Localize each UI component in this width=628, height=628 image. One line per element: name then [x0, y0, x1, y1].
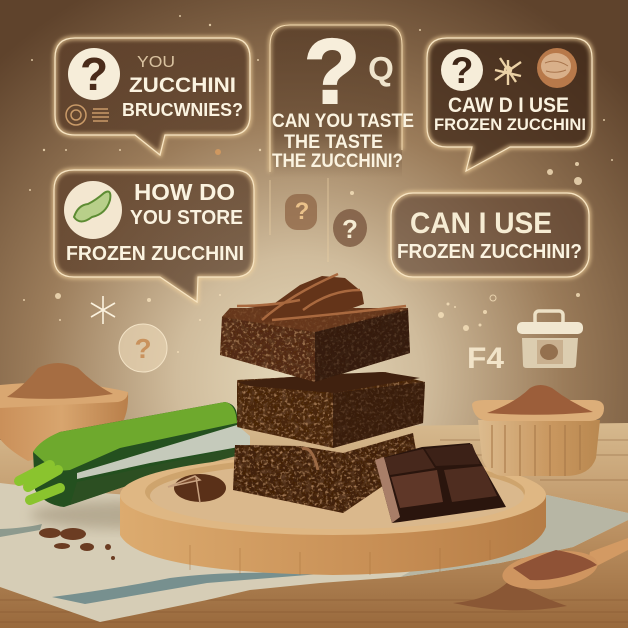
question text: CAN I USE — [410, 207, 552, 240]
icon: question circle: ? — [451, 50, 473, 91]
question text: THE TASTE — [284, 132, 383, 153]
icon: small question oval: ? — [342, 214, 358, 244]
question text — [272, 111, 414, 172]
soft shadow under zucchini and board — [30, 501, 230, 529]
icon: asterisk — [91, 296, 115, 324]
question text: YOU — [137, 54, 175, 71]
icon: small question badge — [285, 194, 317, 230]
question text: YOU STORE — [130, 207, 243, 229]
zucchini stem — [19, 465, 60, 500]
spilled chocolate crumbs — [39, 528, 115, 560]
label: F4: F4 — [467, 342, 504, 375]
question text: FROZEN ZUCCHINI — [66, 243, 244, 265]
question bubble: frozen zucchini top right — [427, 38, 592, 171]
question bubble: can you taste — [270, 21, 414, 262]
wooden spoon with cocoa — [500, 538, 628, 595]
question bubble: can i use frozen zucchini — [391, 193, 589, 277]
chocolate star — [168, 474, 226, 503]
question text: FROZEN ZUCCHINI? — [397, 241, 582, 263]
question text — [434, 94, 586, 134]
icon: zucchini slice — [537, 48, 577, 88]
top brownie — [220, 274, 410, 382]
icon: question circle: ? — [80, 48, 108, 100]
icon: question circle — [441, 49, 483, 91]
question text: BRUCWNIES? — [122, 100, 243, 120]
icon: question circle — [68, 48, 120, 100]
icon: small question oval — [333, 209, 367, 247]
zucchini — [19, 402, 250, 507]
wooden table — [0, 423, 628, 628]
question text: HOW DO — [134, 179, 235, 205]
question bubble: you zucchini brownies — [55, 38, 250, 155]
question text: THE ZUCCHINI? — [272, 151, 403, 172]
linen cloth — [0, 483, 628, 622]
icon: glowing question circle — [119, 324, 167, 372]
stacked brownies — [220, 274, 425, 513]
icon: letter Q: Q — [368, 50, 394, 87]
icon: small question badge: ? — [295, 198, 309, 225]
icon: zucchini circle — [64, 181, 122, 239]
wooden serving board — [120, 455, 546, 575]
bottom brownie — [233, 433, 418, 513]
icon: storage container — [517, 311, 583, 368]
question text: ZUCCHINI — [129, 74, 236, 97]
question text — [122, 54, 243, 120]
icon: molecule — [495, 58, 521, 85]
question bubble: how do you store — [54, 170, 254, 302]
icon: large question mark: ? — [304, 21, 360, 123]
chocolate drizzle — [237, 274, 406, 322]
icon: glowing question circle: ? — [134, 333, 152, 364]
bowl of cocoa powder right — [472, 385, 604, 476]
question text — [397, 207, 582, 263]
chocolate bar — [375, 443, 506, 523]
question text: CAW D I USE — [448, 94, 569, 117]
question text — [66, 179, 244, 265]
icon: swirl and cookie — [66, 105, 109, 125]
glowing particles — [23, 15, 613, 353]
question text: FROZEN ZUCCHINI — [434, 115, 586, 134]
bowl of cocoa powder left — [0, 363, 128, 461]
pile of cocoa on table — [453, 580, 567, 610]
question text: CAN YOU TASTE — [272, 111, 414, 132]
middle brownie — [237, 372, 425, 448]
